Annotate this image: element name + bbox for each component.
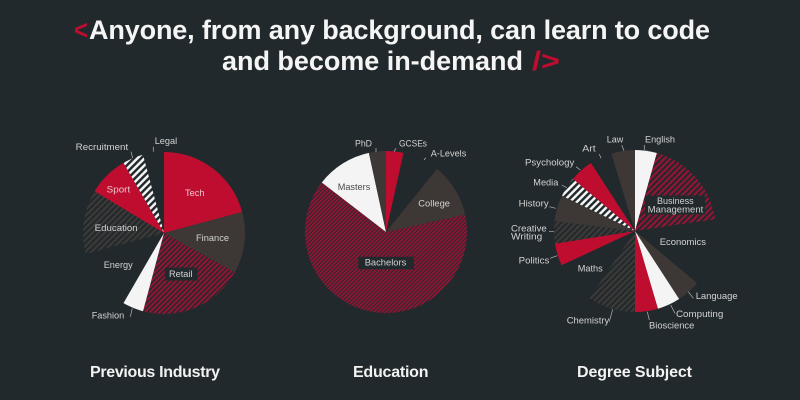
- labels: degree subject: Writing: [511, 232, 542, 242]
- slice: chemistry: [590, 231, 635, 312]
- labels: degree subject: English: [645, 135, 675, 146]
- chart: previous industry pie: [76, 136, 245, 322]
- labels: degree subject: [511, 135, 738, 332]
- labels: degree subject: Creative: [511, 224, 547, 234]
- labels: degree subject: Business: [657, 196, 694, 207]
- heading: degree subject: Degree Subject: [577, 364, 693, 381]
- slice: education: [83, 191, 164, 254]
- label box: retail: [165, 268, 198, 280]
- label box: business management: [645, 196, 705, 214]
- labels: degree subject: Politics: [519, 256, 550, 267]
- slice: creative writing: [554, 221, 635, 244]
- heading: previous industry: Previous Industry: [90, 364, 220, 381]
- labels: previous industry: Tech: [185, 188, 204, 199]
- slice: finance: [164, 212, 245, 272]
- labels: previous industry: Fashion: [92, 310, 124, 322]
- chart: education pie: [305, 139, 467, 313]
- labels: education: A-Levels: [431, 149, 467, 160]
- heading: education: Education: [353, 364, 428, 381]
- slice: bioscience: [635, 231, 658, 312]
- labels: degree subject: Chemistry: [567, 315, 610, 326]
- slice: media: [562, 179, 635, 231]
- slice: english: [635, 150, 657, 231]
- labels: degree subject: Language: [696, 291, 738, 302]
- slice: computing: [635, 231, 679, 309]
- slice: politics: [555, 231, 635, 265]
- labels: previous industry: Education: [95, 223, 138, 234]
- slice: tech: [164, 152, 242, 233]
- slice: PhD: [369, 151, 386, 232]
- labels: previous industry: Sport: [107, 184, 131, 196]
- chart: degree subject pie: [511, 135, 738, 332]
- labels: degree subject: Economics: [660, 237, 706, 248]
- labels: degree subject: Computing: [676, 309, 723, 320]
- labels: education: GCSEs: [399, 139, 427, 150]
- slice: masters: [322, 153, 386, 232]
- labels: degree subject: Psychology: [525, 158, 575, 169]
- slice: psychology: [573, 163, 635, 231]
- labels: education: PhD: [355, 139, 372, 150]
- title: [74, 15, 710, 76]
- slice: fashion: [124, 233, 164, 311]
- slice: college: [386, 169, 465, 232]
- title: Anyone, from any background, can learn to code: [89, 15, 710, 45]
- labels: previous industry: [76, 136, 229, 322]
- labels: previous industry: Retail: [169, 269, 192, 280]
- labels: degree subject: Management: [648, 204, 704, 216]
- slice: GCSEs: [386, 151, 404, 232]
- labels: degree subject: Maths: [578, 264, 603, 275]
- slice: law: [611, 150, 635, 231]
- labels: previous industry: Recruitment: [76, 142, 129, 153]
- labels: degree subject: Bioscience: [649, 321, 694, 332]
- slice: bachelors: [305, 182, 467, 313]
- slice: language: [635, 231, 697, 299]
- title: and become in-demand: [222, 46, 523, 76]
- slice: business management: [635, 153, 715, 231]
- slice: sport: [95, 163, 164, 233]
- labels: previous industry: Energy: [104, 260, 133, 271]
- labels: previous industry: Finance: [196, 233, 229, 244]
- labels: degree subject: Media: [533, 178, 559, 189]
- slice: history: [555, 196, 635, 231]
- labels: degree subject: History: [519, 199, 549, 210]
- labels: degree subject: Law: [607, 135, 623, 146]
- title: <: [74, 15, 88, 45]
- slice: recruitment: [124, 155, 164, 233]
- labels: education: College: [418, 199, 450, 210]
- labels: education: Masters: [338, 182, 371, 193]
- labels: education: Bachelors: [365, 258, 407, 269]
- title: />: [532, 46, 560, 76]
- slice: retail: [143, 233, 235, 314]
- labels: degree subject: Art: [582, 144, 596, 155]
- labels: previous industry: Legal: [155, 136, 177, 147]
- label box: bachelors: [358, 257, 414, 269]
- labels: education: [338, 139, 467, 269]
